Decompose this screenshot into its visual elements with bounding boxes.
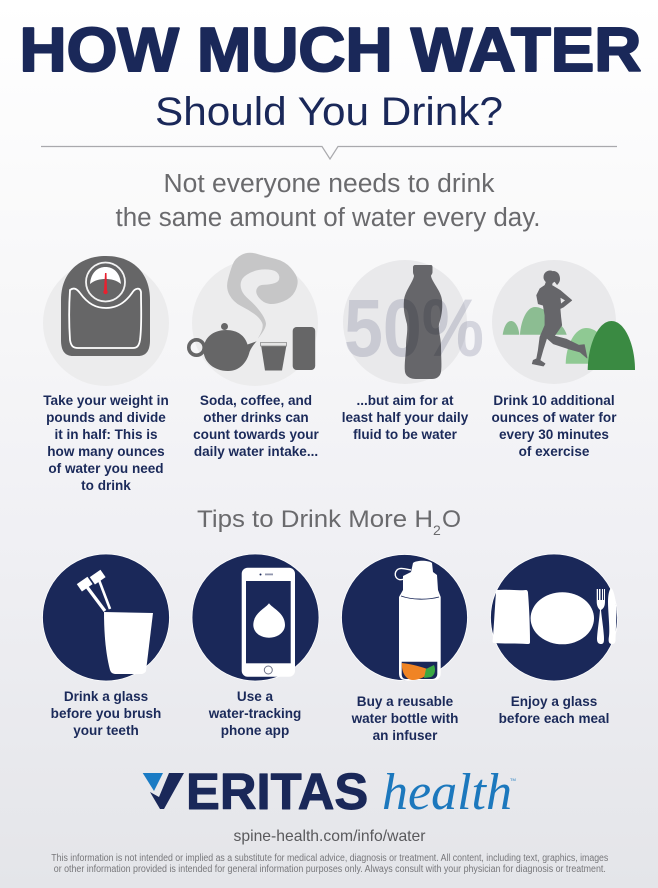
icon: water bottle xyxy=(404,265,442,379)
icon: table setting xyxy=(493,588,616,644)
caption: before meal: before each meal xyxy=(499,711,609,726)
caption: phone app xyxy=(208,689,301,738)
title: Should You Drink? xyxy=(155,90,503,134)
caption: half water xyxy=(342,393,469,442)
title xyxy=(20,15,641,134)
caption: weight: to drink xyxy=(81,478,131,493)
caption: exercise: of exercise xyxy=(519,444,590,459)
caption: exercise xyxy=(492,393,617,459)
icon: infuser bottle xyxy=(395,561,441,680)
caption: other drinks: count towards your xyxy=(193,427,320,442)
icon: teapot xyxy=(189,323,257,371)
caption: phone app: phone app xyxy=(221,723,289,738)
caption: brush teeth: your teeth xyxy=(73,723,139,738)
heading: tips: 2 xyxy=(433,522,441,538)
panel: other drinks xyxy=(189,253,320,459)
panel: before meal xyxy=(490,554,618,726)
panel: weight xyxy=(43,256,169,493)
caption: brush teeth: before you brush xyxy=(51,706,161,721)
icon: cup xyxy=(260,342,286,370)
panel: half water xyxy=(342,260,484,442)
caption: weight: Take your weight in xyxy=(43,393,169,408)
caption: other drinks xyxy=(193,393,320,459)
icon: steam xyxy=(227,253,298,339)
caption: before meal xyxy=(499,694,609,726)
caption: half water: fluid to be water xyxy=(353,427,458,442)
heading: tips: O xyxy=(442,506,461,533)
caption: weight: pounds and divide xyxy=(46,410,166,425)
caption: weight: it in half: This is xyxy=(54,427,158,442)
caption: other drinks: daily water intake... xyxy=(194,444,318,459)
caption: reusable bottle xyxy=(351,694,458,743)
disclaimer xyxy=(51,853,608,875)
disclaimer: or other information provided is intended for general information purposes only. Always consult with your physician for diagnosis or treatment. xyxy=(54,864,606,875)
logo: Veritas health: health xyxy=(382,764,512,821)
icon: phone xyxy=(242,568,295,677)
title: HOW MUCH WATER xyxy=(20,15,641,85)
panel: phone app xyxy=(192,554,319,738)
caption: half water: least half your daily xyxy=(342,410,469,425)
caption: exercise: every 30 minutes xyxy=(499,427,609,442)
caption: exercise: ounces of water for xyxy=(492,410,617,425)
50 percent figure: 50% xyxy=(344,283,484,374)
logo: Veritas health: ERITAS xyxy=(186,763,368,820)
caption: brush teeth xyxy=(51,689,161,738)
icon: toothbrushes and glass xyxy=(77,570,153,674)
panel: exercise xyxy=(492,260,635,459)
panel: brush teeth xyxy=(42,554,170,738)
caption: weight xyxy=(43,393,169,493)
heading: tips: Tips to Drink More H xyxy=(197,506,433,533)
divider with notch xyxy=(41,146,617,159)
caption: half water: ...but aim for at xyxy=(356,393,454,408)
icon: soda can xyxy=(293,327,315,370)
caption: before meal: Enjoy a glass xyxy=(511,694,597,709)
caption: other drinks: other drinks can xyxy=(203,410,309,425)
caption: phone app: water-tracking xyxy=(208,706,301,721)
icon: runner xyxy=(532,270,587,366)
icon: hills xyxy=(503,307,635,370)
caption: other drinks: Soda, coffee, and xyxy=(200,393,312,408)
caption: reusable bottle: Buy a reusable xyxy=(357,694,454,709)
caption: exercise: Drink 10 additional xyxy=(493,393,615,408)
icon: logo checkmark xyxy=(143,773,184,809)
icon: bathroom scale xyxy=(61,256,150,356)
intro text: Not everyone needs to drink xyxy=(164,170,495,198)
intro text: the same amount of water every day. xyxy=(116,204,540,232)
caption: brush teeth: Drink a glass xyxy=(64,689,148,704)
disclaimer: This information is not intended or implied as a substitute for medical advice, diagnosis or treatment. All content, including text, graphics, images xyxy=(51,853,608,864)
caption: reusable bottle: water bottle with xyxy=(351,711,458,726)
logo: Veritas health xyxy=(143,763,516,821)
caption: weight: of water you need xyxy=(48,461,164,476)
caption: phone app: Use a xyxy=(237,689,274,704)
source url: spine-health.com/info/water xyxy=(234,828,426,845)
caption: weight: how many ounces xyxy=(47,444,165,459)
logo: Veritas health: TM xyxy=(510,777,516,782)
intro text xyxy=(116,170,540,232)
panel: reusable bottle xyxy=(342,554,468,743)
caption: reusable bottle: an infuser xyxy=(373,728,438,743)
